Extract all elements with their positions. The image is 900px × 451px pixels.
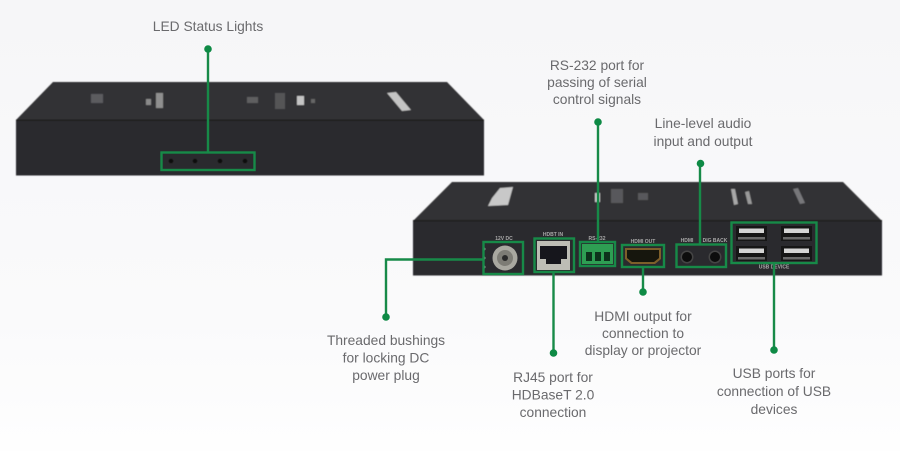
callout: threaded bushings: power plug [352,368,420,383]
port: DC power jack: 12V DC [495,236,513,242]
port: USB quad: USB DEVICE [759,264,790,270]
callout: line-level audio: input and output [654,134,753,149]
callout: threaded bushings [327,242,523,383]
callout: RS-232 port: passing of serial [547,75,647,90]
callout: HDMI output: connection to [602,326,684,341]
callout: USB ports: USB ports for [733,366,816,381]
callout: threaded bushings: for locking DC [343,350,429,366]
callout: LED Status Lights: LED Status Lights [153,19,263,34]
callout: RS-232 port: control signals [553,92,641,107]
callout: line-level audio: Line-level audio [655,116,752,131]
port: audio jacks: HDMI [681,238,694,244]
port: RS-232 terminal block [582,236,613,264]
port: audio jacks: DIG BACK [703,238,728,244]
callout: HDMI output [585,245,702,358]
callout: RJ45 port [512,238,595,420]
port: DC power jack [482,236,518,270]
port: HDMI [625,239,661,264]
callout: RJ45 port: connection [520,405,586,420]
callout: threaded bushings: Threaded bushings [327,333,445,348]
callout: RJ45 port: HDBaseT 2.0 [512,388,595,402]
callout: HDMI output: HDMI output for [594,309,692,324]
callout: USB ports [717,222,831,417]
port: USB quad [736,226,812,270]
port: audio jacks [680,238,728,264]
device: top unit, LED side [16,82,484,176]
callout: USB ports: devices [751,402,797,417]
callout: RJ45 port: RJ45 port for [513,370,593,385]
device: bottom unit, port side [413,182,882,276]
callout: RS-232 port: RS-232 port for [550,58,645,73]
port: HDMI: HDMI OUT [631,239,655,245]
callout: USB ports: connection of USB [717,384,831,399]
port: RS-232 terminal block: RS-232 [589,236,606,242]
callout: HDMI output: display or projector [585,343,702,358]
port: RJ45 [537,232,570,270]
callout: LED Status Lights [153,19,263,170]
port: RJ45: HDBT IN [543,232,564,238]
callout: RS-232 port [547,58,647,266]
callout: line-level audio [654,116,753,267]
